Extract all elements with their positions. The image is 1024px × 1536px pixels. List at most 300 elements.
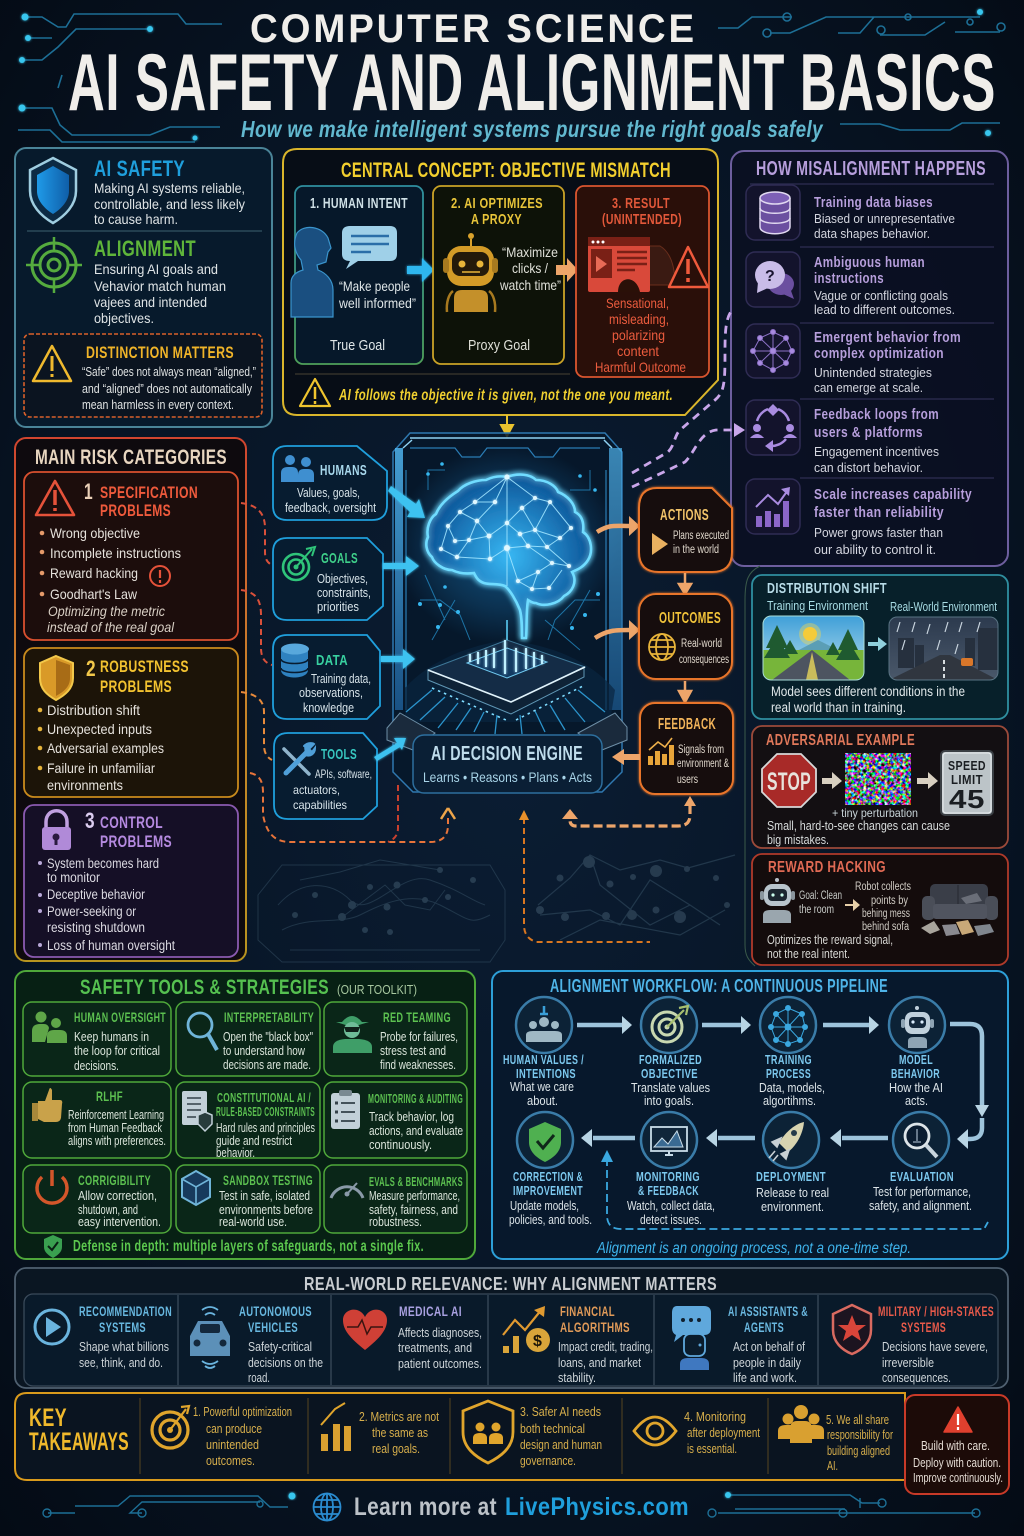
step: formalized objective: into goals. <box>644 1094 694 1108</box>
item: scale outpaces reliability: Scale increases capability <box>814 486 972 503</box>
panel: adversarial example <box>752 726 1008 848</box>
brain <box>426 474 591 638</box>
item: AI assistants and agents <box>672 1304 808 1385</box>
item: ambiguous human instructions <box>746 252 955 317</box>
box: robustness problems: Adversarial examples <box>47 740 164 756</box>
callout: distinction matters: DISTINCTION MATTERS <box>86 343 234 362</box>
panel: adversarial example: big mistakes. <box>767 832 829 847</box>
callout: defense in depth <box>44 1235 424 1258</box>
box: robustness problems: ROBUSTNESS <box>100 657 189 676</box>
card: corrigibility: CORRIGIBILITY <box>78 1172 151 1188</box>
icon: speed limit sign: 45 <box>949 784 985 814</box>
column: human intent: 1. HUMAN INTENT <box>310 195 408 212</box>
step: monitoring and feedback <box>627 1112 715 1227</box>
engine label <box>413 735 602 793</box>
step: model behavior: acts. <box>905 1094 928 1108</box>
card: interpretability: INTERPRETABILITY <box>224 1009 314 1025</box>
panel: distribution shift: DISTRIBUTION SHIFT <box>767 580 887 597</box>
input: goals: priorities <box>317 600 359 614</box>
text: AI safety definition: to cause harm. <box>94 211 178 227</box>
item: emergent behavior: Unintended strategies <box>814 365 932 380</box>
takeaway 2: real goals. <box>372 1441 420 1456</box>
column: unintended result: Harmful Outcome <box>595 359 686 375</box>
column: AI optimizes proxy: clicks / <box>512 260 548 276</box>
input: goals: GOALS <box>321 550 358 567</box>
item: military high-stakes systems: irreversible <box>882 1355 934 1370</box>
step: human values <box>503 997 584 1108</box>
step: correction and improvement: Update models, <box>510 1199 579 1213</box>
step: monitoring and feedback: detect issues. <box>640 1213 702 1227</box>
dashed return loop <box>601 1150 988 1229</box>
item: feedback loops: can distort behavior. <box>814 460 923 475</box>
center: AI decision engine frame <box>387 433 627 793</box>
icon: globe <box>314 1494 340 1520</box>
takeaway 1: can produce <box>206 1421 262 1436</box>
item: financial algorithms <box>503 1304 653 1385</box>
card: constitutional AI: Hard rules and principles <box>216 1121 315 1135</box>
image: perturbation noise <box>845 753 911 805</box>
panel: distribution shift <box>745 566 1008 966</box>
callout: distinction matters: and “aligned” does not automatically <box>82 382 253 396</box>
card: monitoring and auditing: continuously. <box>369 1137 432 1152</box>
panel: distribution shift: Model sees different conditions in the <box>771 684 965 699</box>
card: sandbox testing: real-world use. <box>219 1214 287 1229</box>
takeaway 4 <box>634 1409 760 1456</box>
bracket blocks <box>387 713 627 750</box>
takeaway 4: after deployment <box>687 1425 760 1440</box>
item: autonomous vehicles <box>190 1304 323 1385</box>
icon: harmful content browser <box>588 237 708 292</box>
box: specification problems: 1 <box>84 479 93 504</box>
item: recommendation systems: SYSTEMS <box>99 1320 146 1335</box>
box: control problems: Loss of human oversight <box>47 938 175 953</box>
output: outcomes: OUTCOMES <box>659 610 721 627</box>
item: training data biases: Biased or unrepresentative <box>814 211 955 226</box>
item: feedback loops: Engagement incentives <box>814 444 939 459</box>
heading: safety tools: (OUR TOOLKIT) <box>337 982 417 997</box>
panel: adversarial example: ADVERSARIAL EXAMPLE <box>766 732 915 749</box>
heading: main risk categories: MAIN RISK CATEGORIES <box>35 446 227 469</box>
dashed loop: feedback back to engine <box>562 796 696 826</box>
faint network decoration right <box>536 855 735 940</box>
heading: central concept: CENTRAL CONCEPT: OBJECTIVE MISMATCH <box>341 159 671 182</box>
panel: AI safety and alignment definitions <box>15 148 272 427</box>
step: formalized objective: FORMALIZED <box>639 1053 702 1067</box>
column: unintended result: Sensational, <box>606 295 669 311</box>
chip <box>405 620 615 734</box>
column: unintended result: polarizing <box>612 327 665 343</box>
panel: distribution shift: Real-World Environment <box>890 600 997 614</box>
panel: reward hacking <box>752 854 1008 965</box>
input: humans <box>273 446 387 520</box>
input: data: observations, <box>299 686 363 700</box>
image: training environment <box>763 616 864 680</box>
box: robustness problems: Distribution shift <box>47 702 140 718</box>
step: human values: HUMAN VALUES / <box>503 1053 584 1067</box>
takeaway 5: building aligned <box>827 1443 890 1458</box>
input: goals: constraints, <box>317 586 371 600</box>
box: specification problems: Goodhart's Law <box>50 586 138 602</box>
item: autonomous vehicles: VEHICLES <box>248 1320 298 1335</box>
panel: reward hacking: REWARD HACKING <box>768 859 886 876</box>
callout: objective warning: AI follows the objective it is given, not the one you meant. <box>338 387 673 404</box>
step: training process: TRAINING <box>765 1053 812 1067</box>
item: recommendation systems: Shape what billions <box>79 1339 169 1354</box>
item: financial algorithms: Impact credit, trading, <box>558 1339 653 1354</box>
panel: how misalignment happens <box>731 151 1008 566</box>
item: medical AI: patient outcomes. <box>398 1356 482 1371</box>
arrows: inputs to brain <box>374 486 425 761</box>
step: human values: about. <box>527 1094 558 1108</box>
panel: key takeaways <box>15 1393 905 1480</box>
takeaway 2 <box>321 1403 439 1456</box>
input: goals: Objectives, <box>317 572 368 586</box>
footer link text: Learn more at <box>354 1493 497 1521</box>
card: corrigibility: Allow correction, <box>78 1188 157 1203</box>
faint network decoration left <box>258 860 505 962</box>
subtitle: How we make intelligent systems pursue the right goals safely <box>241 116 824 142</box>
card: sandbox testing <box>176 1165 320 1233</box>
item: AI assistants and agents: life and work. <box>733 1370 797 1385</box>
input: humans: Values, goals, <box>297 486 360 500</box>
card: constitutional AI: behavior. <box>216 1146 255 1160</box>
column: unintended result: misleading, <box>609 311 669 327</box>
output: feedback: users <box>677 774 698 786</box>
takeaway 5: AI. <box>827 1458 838 1473</box>
column: AI optimizes proxy: Proxy Goal <box>468 337 530 354</box>
heading: alignment: ALIGNMENT <box>94 236 196 261</box>
takeaway 1: unintended <box>206 1437 259 1452</box>
step: formalized objective <box>631 997 710 1108</box>
card: interpretability <box>176 1002 320 1076</box>
card: monitoring and auditing <box>324 1082 467 1158</box>
card: RLHF: from Human Feedback <box>68 1121 163 1135</box>
icon: speed limit sign: LIMIT <box>951 772 983 787</box>
step: evaluation <box>869 1112 972 1213</box>
step: correction and improvement <box>509 1112 592 1227</box>
box: control problems: 3 <box>85 808 95 833</box>
item: financial algorithms: $ <box>533 1333 542 1350</box>
step: deployment: DEPLOYMENT <box>756 1170 826 1184</box>
takeaway 5: responsibility for <box>827 1427 893 1442</box>
input: data <box>273 635 380 719</box>
card: human oversight: HUMAN OVERSIGHT <box>74 1009 166 1025</box>
card: corrigibility <box>23 1165 171 1233</box>
panel: alignment workflow <box>492 971 1008 1259</box>
takeaway 1: 1. Powerful optimization <box>193 1404 292 1419</box>
output: outcomes <box>639 594 732 679</box>
step: training process: algortihms. <box>763 1094 816 1108</box>
takeaway 3 <box>463 1401 602 1468</box>
step: model behavior: MODEL <box>899 1053 933 1067</box>
step: training process: Data, models, <box>759 1081 825 1095</box>
step: training process: PROCESS <box>766 1067 811 1081</box>
takeaway 3: governance. <box>520 1453 576 1468</box>
arrow: outcomes to feedback <box>679 681 691 702</box>
arrow: actions to outcomes <box>679 573 691 594</box>
box: control problems <box>24 805 238 957</box>
output: outcomes: consequences <box>679 654 729 666</box>
step: formalized objective: Translate values <box>631 1081 710 1095</box>
output: feedback <box>640 703 733 794</box>
step: correction and improvement: CORRECTION & <box>513 1170 583 1184</box>
card: human oversight: Keep humans in <box>74 1029 149 1044</box>
step: monitoring and feedback: & FEEDBACK <box>638 1184 699 1198</box>
step: monitoring and feedback: MONITORING <box>636 1170 700 1184</box>
item: medical AI: MEDICAL AI <box>399 1304 462 1319</box>
item: feedback loops <box>746 400 939 475</box>
icon: robot <box>443 233 498 312</box>
box: robustness problems: Unexpected inputs <box>47 721 152 737</box>
arrow: feedback to engine <box>612 749 640 765</box>
box: robustness problems <box>24 648 238 797</box>
takeaway 2: the same as <box>372 1425 428 1440</box>
panel: distribution shift: Training Environment <box>767 599 868 613</box>
input: humans: feedback, oversight <box>285 501 376 515</box>
column: human intent: True Goal <box>330 337 385 354</box>
panel: reward hacking: points by <box>871 895 908 907</box>
callout: defense in depth: Defense in depth: multiple layers of safeguards, not a single fix. <box>73 1238 424 1255</box>
column: human intent: “Make people <box>339 278 410 294</box>
card: monitoring and auditing: Track behavior, log <box>369 1109 454 1124</box>
card: constitutional AI: guide and restrict <box>216 1134 292 1148</box>
input: goals <box>273 538 383 620</box>
card: constitutional AI <box>176 1082 320 1160</box>
step: human values: What we care <box>510 1080 574 1094</box>
input: tools: APIs, software, <box>315 767 372 781</box>
input: tools: capabilities <box>293 798 347 812</box>
item: training data biases: Training data biases <box>814 194 933 211</box>
box: specification problems: PROBLEMS <box>100 501 171 520</box>
text: AI safety definition: Making AI systems reliable, <box>94 180 245 196</box>
card: constitutional AI: RULE-BASED CONSTRAINTS <box>216 1104 315 1119</box>
item: ambiguous human instructions: Ambiguous human <box>814 254 925 271</box>
item: financial algorithms: stability. <box>558 1370 596 1385</box>
item: financial algorithms: FINANCIAL <box>560 1304 615 1319</box>
card: evals and benchmarks <box>324 1165 467 1233</box>
text: AI safety definition: controllable, and less likely <box>94 196 245 212</box>
item: scale outpaces reliability: Power grows faster than <box>814 525 943 540</box>
icon: speech bubble <box>342 226 397 269</box>
box: control problems: Power-seeking or <box>47 904 136 919</box>
panel: real-world relevance <box>15 1268 1008 1388</box>
output: actions: Plans executed <box>673 530 729 542</box>
card: RLHF: Reinforcement Learning <box>68 1108 164 1122</box>
item: autonomous vehicles: AUTONOMOUS <box>239 1304 312 1319</box>
step: human values: INTENTIONS <box>516 1067 576 1081</box>
card: evals and benchmarks: EVALS & BENCHMARKS <box>369 1174 463 1189</box>
panel: reward hacking: Goal: Clean <box>799 890 842 902</box>
item: medical AI: Affects diagnoses, <box>398 1325 482 1340</box>
card: evals and benchmarks: Measure performance, <box>369 1189 460 1203</box>
takeaway 3: 3. Safer AI needs <box>520 1404 601 1419</box>
icon: shield <box>30 158 76 223</box>
footer link text: LivePhysics.com <box>505 1493 689 1521</box>
box: specification problems <box>24 472 238 640</box>
item: ambiguous human instructions: lead to different outcomes. <box>814 302 955 317</box>
takeaway 1: outcomes. <box>206 1453 255 1468</box>
icon: stop sign: STOP <box>767 768 811 796</box>
icon: person <box>291 227 333 317</box>
card: human oversight: decisions. <box>74 1058 119 1073</box>
step: model behavior: How the AI <box>889 1081 943 1095</box>
output: actions: ACTIONS <box>660 507 709 524</box>
arrow: goal to hack <box>845 899 860 911</box>
box: control problems: resisting shutdown <box>47 920 145 935</box>
column: AI optimizes proxy: “Maximize <box>502 244 558 260</box>
item: financial algorithms: ALGORITHMS <box>560 1320 630 1335</box>
panel: reward hacking: Optimizes the reward signal, <box>767 933 893 947</box>
box: robustness problems: 2 <box>86 656 96 681</box>
callout: build with care <box>905 1395 1009 1494</box>
box: control problems: PROBLEMS <box>100 832 172 851</box>
output: actions <box>639 488 732 572</box>
item: medical AI <box>343 1304 482 1371</box>
item: military high-stakes systems: consequences. <box>882 1370 951 1385</box>
text: alignment definition <box>94 261 226 326</box>
takeaway 5: 5. We all share <box>826 1412 889 1427</box>
icon: speed limit sign <box>941 751 993 815</box>
card: RLHF <box>23 1082 171 1158</box>
text: AI safety definition <box>94 180 245 227</box>
heading: workflow: ALIGNMENT WORKFLOW: A CONTINUOUS PIPELINE <box>550 976 888 996</box>
panel: distribution shift: real world than in training. <box>771 700 906 715</box>
item: scale outpaces reliability <box>746 479 972 557</box>
takeaway 5 <box>778 1405 893 1473</box>
item: training data biases <box>746 185 955 241</box>
arrows: pipeline flow <box>577 1016 989 1149</box>
panel: reward hacking: the room <box>799 904 834 916</box>
card: evals and benchmarks: robustness. <box>369 1215 422 1229</box>
item: autonomous vehicles: decisions on the <box>248 1355 323 1370</box>
panel: central concept objective mismatch <box>283 149 718 415</box>
arrow: noise to speed sign <box>917 772 938 789</box>
item: recommendation systems: see, think, and do. <box>79 1355 163 1370</box>
text: alignment definition: vajees and intended <box>94 294 207 310</box>
output: feedback: FEEDBACK <box>658 716 716 733</box>
header circuit decoration <box>18 9 1005 142</box>
heading: AI safety: AI SAFETY <box>94 156 185 181</box>
card: interpretability: decisions are made. <box>223 1057 311 1072</box>
callout: distinction matters: mean harmless in every context. <box>82 398 234 412</box>
card: monitoring and auditing: actions, and evaluate <box>369 1123 463 1138</box>
arrow: stop to noise <box>822 772 842 789</box>
step: deployment: Release to real <box>756 1186 829 1200</box>
card: human oversight: the loop for critical <box>74 1043 160 1058</box>
takeaway 4: 4. Monitoring <box>684 1409 746 1424</box>
card: RLHF: RLHF <box>96 1088 123 1104</box>
item: feedback loops: Feedback loops from <box>814 406 939 423</box>
column: unintended result: 3. RESULT <box>612 195 670 212</box>
takeaway 3: both technical <box>520 1421 585 1436</box>
input: data: Training data, <box>311 672 371 686</box>
item: feedback loops: users & platforms <box>814 424 923 441</box>
card: interpretability: Open the "black box" <box>223 1029 313 1044</box>
text: alignment definition: objectives. <box>94 310 154 326</box>
callout: distinction matters <box>24 334 262 417</box>
panel: reward hacking: Robot collects <box>855 881 911 893</box>
card: red teaming: Probe for failures, <box>380 1029 458 1044</box>
text: alignment definition: Ensuring AI goals and <box>94 261 218 277</box>
dashed connectors: misalignment to engine <box>632 310 745 487</box>
item: ambiguous human instructions: instructions <box>814 270 884 287</box>
takeaway 1 <box>152 1404 292 1468</box>
input: data: DATA <box>316 652 348 669</box>
item: military high-stakes systems <box>833 1304 994 1385</box>
card: interpretability: to understand how <box>223 1043 305 1058</box>
item: recommendation systems <box>35 1304 172 1370</box>
input: humans: HUMANS <box>320 462 367 479</box>
engine label: AI DECISION ENGINE <box>431 743 583 765</box>
heading: key takeaways: KEY <box>29 1404 67 1432</box>
icon: sofa with trash <box>921 884 998 936</box>
item: financial algorithms: loans, and market <box>558 1355 641 1370</box>
card: red teaming: find weaknesses. <box>380 1057 456 1072</box>
step: evaluation: Test for performance, <box>873 1185 971 1199</box>
item: military high-stakes systems: Decisions have severe, <box>882 1339 988 1354</box>
card: red teaming: RED TEAMING <box>383 1009 451 1025</box>
icon: robot <box>760 878 795 923</box>
output: feedback: environment & <box>677 758 729 770</box>
box: control problems: System becomes hard <box>47 856 159 871</box>
footer link text <box>354 1493 689 1521</box>
card: corrigibility: shutdown, and <box>78 1202 138 1217</box>
item: AI assistants and agents: AI ASSISTANTS & <box>728 1304 808 1319</box>
item: scale outpaces reliability: faster than reliability <box>814 504 944 521</box>
box: robustness problems: Failure in unfamiliar <box>47 760 155 776</box>
step: model behavior <box>889 997 945 1108</box>
arrow: environments <box>868 637 887 651</box>
item: emergent behavior: complex optimization <box>814 345 944 362</box>
engine label: Learns • Reasons • Plans • Acts <box>423 769 592 785</box>
title: COMPUTER SCIENCE <box>250 7 697 51</box>
heading: safety tools: SAFETY TOOLS & STRATEGIES <box>80 976 329 999</box>
panel: reward hacking: behind sofa <box>862 921 909 933</box>
caption: ongoing process: Alignment is an ongoing process, not a one-time step. <box>596 1240 911 1257</box>
input: data: knowledge <box>303 701 354 715</box>
step: model behavior: BEHAVIOR <box>891 1067 940 1081</box>
card: sandbox testing: SANDBOX TESTING <box>223 1172 313 1188</box>
column: AI optimizes proxy: watch time” <box>499 277 561 293</box>
box: control problems: CONTROL <box>100 813 163 832</box>
arrow: proxy to result <box>556 258 578 282</box>
step: training process <box>759 997 825 1108</box>
callout: build with care: Build with care. <box>921 1438 990 1453</box>
card: sandbox testing: environments before <box>219 1202 313 1217</box>
step: deployment: environment. <box>761 1200 824 1214</box>
heading: key takeaways: TAKEAWAYS <box>29 1428 129 1456</box>
output: actions: in the world <box>673 544 719 556</box>
card: human oversight <box>23 1002 171 1076</box>
box: specification problems: SPECIFICATION <box>100 483 198 502</box>
output: feedback: Signals from <box>678 744 724 756</box>
arrow: intent to proxy <box>407 258 434 282</box>
item: scale outpaces reliability: our ability to control it. <box>814 542 936 557</box>
panel: reward hacking: not the real intent. <box>767 947 850 961</box>
column: unintended result <box>576 186 709 377</box>
panel: adversarial example: Small, hard-to-see changes can cause <box>767 818 950 833</box>
item: training data biases: data shapes behavior. <box>814 226 930 241</box>
item: AI assistants and agents: Act on behalf of <box>733 1339 805 1354</box>
card: monitoring and auditing: MONITORING & AUDITING <box>368 1091 463 1106</box>
step: evaluation: EVALUATION <box>890 1170 954 1184</box>
input: tools: TOOLS <box>321 746 357 763</box>
dashed connectors: risks to inputs <box>241 503 455 842</box>
item: medical AI: treatments, and <box>398 1340 472 1355</box>
step: monitoring and feedback: Watch, collect data, <box>627 1199 715 1213</box>
box: specification problems: Wrong objective <box>50 525 140 541</box>
card: sandbox testing: Test in safe, isolated <box>219 1188 310 1203</box>
